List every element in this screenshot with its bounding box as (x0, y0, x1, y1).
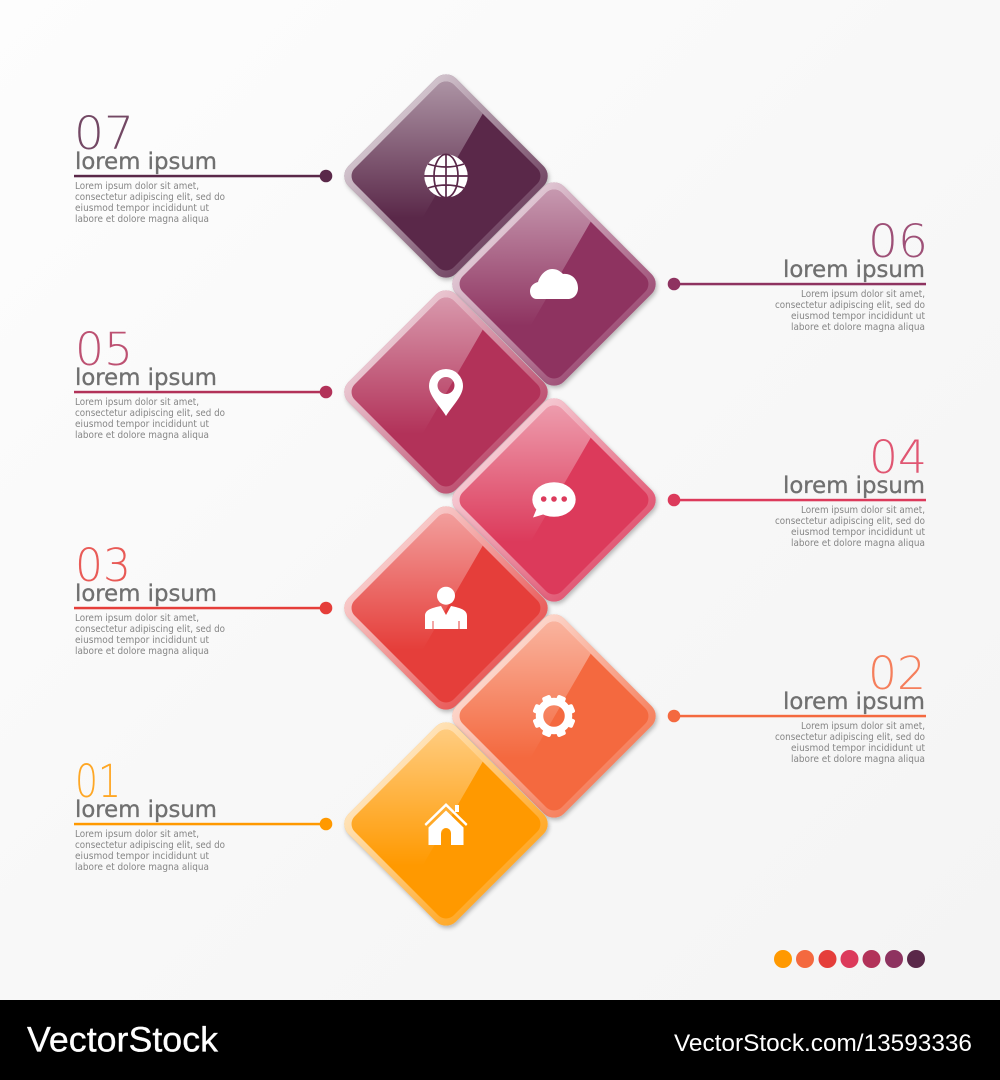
body text 04: labore et dolore magna aliqua (791, 538, 925, 549)
body text 06 (775, 289, 925, 333)
footer url: VectorStock.com/13593336 (674, 1030, 972, 1057)
diamond 06 with cloud icon (444, 174, 661, 394)
diamond 07 with globe icon (336, 66, 553, 286)
footer brand: VectorStock (27, 1020, 219, 1060)
body text 04: Lorem ipsum dolor sit amet, (801, 505, 925, 516)
body text 04 (775, 505, 925, 549)
heading 02: lorem ipsum (783, 689, 925, 715)
connector 02 (668, 710, 926, 722)
label 06 (668, 215, 928, 333)
diamond 03 with person icon (336, 498, 553, 718)
label 03 (74, 539, 332, 657)
body text 02: Lorem ipsum dolor sit amet, (801, 721, 925, 732)
body text 06: eiusmod tempor incididunt ut (791, 311, 925, 322)
connector 03 (74, 602, 332, 614)
label 02 (668, 647, 926, 765)
body text 07: labore et dolore magna aliqua (75, 214, 209, 225)
number 07: 07 (74, 107, 134, 160)
icon: speech bubble (532, 482, 576, 518)
connector 04 (668, 494, 926, 506)
icon: cloud (530, 269, 578, 299)
number 05: 05 (75, 323, 133, 376)
number 01: 01 (75, 755, 121, 808)
icon: house (424, 803, 468, 845)
heading 07: lorem ipsum (75, 149, 217, 175)
body text 01: labore et dolore magna aliqua (75, 862, 209, 873)
label 04 (668, 431, 927, 549)
diamond 04 with speech bubble icon (444, 390, 661, 610)
body text 06: Lorem ipsum dolor sit amet, (801, 289, 925, 300)
body text 05: eiusmod tempor incididunt ut (75, 419, 209, 430)
body text 04: eiusmod tempor incididunt ut (791, 527, 925, 538)
heading 06: lorem ipsum (783, 257, 925, 283)
body text 05 (75, 397, 225, 441)
body text 03: consectetur adipiscing elit, sed do (75, 624, 225, 635)
icon: gear (532, 694, 576, 738)
body text 02: labore et dolore magna aliqua (791, 754, 925, 765)
icon: globe (424, 154, 468, 198)
diamond 01 with house icon (336, 714, 553, 934)
body text 01: Lorem ipsum dolor sit amet, (75, 829, 199, 840)
body text 02 (775, 721, 925, 765)
body text 01 (75, 829, 225, 873)
body text 07: Lorem ipsum dolor sit amet, (75, 181, 199, 192)
label 01 (74, 755, 332, 873)
body text 06: consectetur adipiscing elit, sed do (775, 300, 925, 311)
colour legend dots (774, 950, 925, 968)
body text 07 (75, 181, 225, 225)
diamond 02 with gear icon (444, 606, 661, 826)
body text 01: eiusmod tempor incididunt ut (75, 851, 209, 862)
body text 04: consectetur adipiscing elit, sed do (775, 516, 925, 527)
heading 01: lorem ipsum (75, 797, 217, 823)
connector 07 (74, 170, 332, 182)
body text 02: consectetur adipiscing elit, sed do (775, 732, 925, 743)
heading 05: lorem ipsum (75, 365, 217, 391)
diamond 05 with map pin icon (336, 282, 553, 502)
number 04: 04 (869, 431, 927, 484)
body text 06: labore et dolore magna aliqua (791, 322, 925, 333)
body text 05: Lorem ipsum dolor sit amet, (75, 397, 199, 408)
connector 06 (668, 278, 926, 290)
body text 02: eiusmod tempor incididunt ut (791, 743, 925, 754)
icon: person (425, 587, 467, 629)
body text 03: eiusmod tempor incididunt ut (75, 635, 209, 646)
body text 07: consectetur adipiscing elit, sed do (75, 192, 225, 203)
label 07 (74, 107, 332, 225)
number 03: 03 (75, 539, 131, 592)
heading 03: lorem ipsum (75, 581, 217, 607)
body text 07: eiusmod tempor incididunt ut (75, 203, 209, 214)
heading 04: lorem ipsum (783, 473, 925, 499)
body text 05: consectetur adipiscing elit, sed do (75, 408, 225, 419)
connector 05 (74, 386, 332, 398)
body text 01: consectetur adipiscing elit, sed do (75, 840, 225, 851)
number 02: 02 (868, 647, 926, 700)
number 06: 06 (868, 215, 928, 268)
watermark footer bar (0, 1000, 1000, 1080)
body text 03: labore et dolore magna aliqua (75, 646, 209, 657)
body text 03 (75, 613, 225, 657)
body text 03: Lorem ipsum dolor sit amet, (75, 613, 199, 624)
icon: map pin (429, 369, 463, 416)
body text 05: labore et dolore magna aliqua (75, 430, 209, 441)
label 05 (74, 323, 332, 441)
connector 01 (74, 818, 332, 830)
